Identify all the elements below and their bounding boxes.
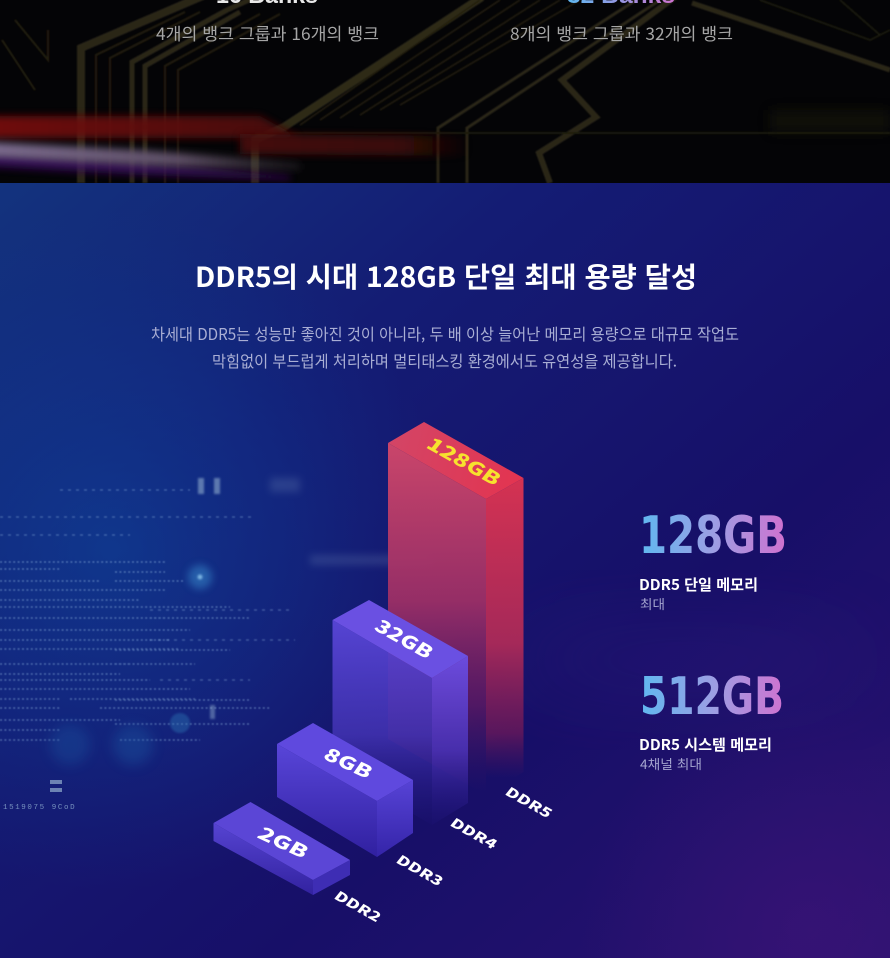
label: DDR5: DDR5: [502, 782, 557, 822]
label: DDR2: DDR2: [331, 886, 386, 926]
stat: 512GB system memory: [640, 676, 782, 770]
label: DDR3: DDR3: [393, 850, 448, 890]
panel: top circuit section: [0, 0, 890, 183]
bar: DDR3 8GB: 8GB: [319, 742, 378, 784]
stat: 128GB single memory: 128GB: [639, 506, 787, 566]
stat: 128GB single memory: 최대: [640, 594, 665, 613]
bar: DDR5 128GB: [388, 422, 524, 795]
circuit board lines: [2, 0, 890, 183]
text: data texture digits: 1519075 9CoD: [3, 804, 76, 812]
bar: DDR4 32GB: [332, 600, 468, 825]
blurred lights: [0, 110, 890, 180]
bar: DDR2 2GB: 2GB: [253, 821, 314, 864]
stat: 512GB system memory: 512GB: [640, 667, 784, 727]
text: description line 1: 차세대 DDR5는 성능만 좋아진 것이 아니라, 두 배 이상 늘어난 메모리 용량으로 대규모 작업도: [151, 321, 739, 345]
stat: 512GB system memory: DDR5 시스템 메모리: [639, 734, 772, 755]
bar: DDR4 32GB: 32GB: [369, 613, 440, 664]
text: description line 2: 막힘없이 부드럽게 처리하며 멀티태스킹 환경에서도 유연성을 제공합니다.: [212, 348, 677, 372]
title: DDR5의 시대 128GB 단일 최대 용량 달성: [195, 256, 697, 296]
label: DDR4: DDR4: [447, 813, 502, 853]
stat: 128GB single memory: [640, 514, 784, 610]
bar: DDR3 8GB: [277, 723, 413, 857]
text: 32 banks description: 8개의 뱅크 그룹과 32개의 뱅크: [510, 20, 733, 45]
chart: isometric capacity bars: [214, 422, 557, 926]
data texture: [0, 490, 295, 740]
bar: DDR2 2GB: [214, 802, 350, 895]
bar: DDR5 128GB: 128GB: [421, 431, 508, 491]
stat: 512GB system memory: 4채널 최대: [640, 754, 702, 773]
text: 16 banks description: 4개의 뱅크 그룹과 16개의 뱅크: [156, 20, 379, 45]
stat: 128GB single memory: DDR5 단일 메모리: [639, 574, 758, 595]
